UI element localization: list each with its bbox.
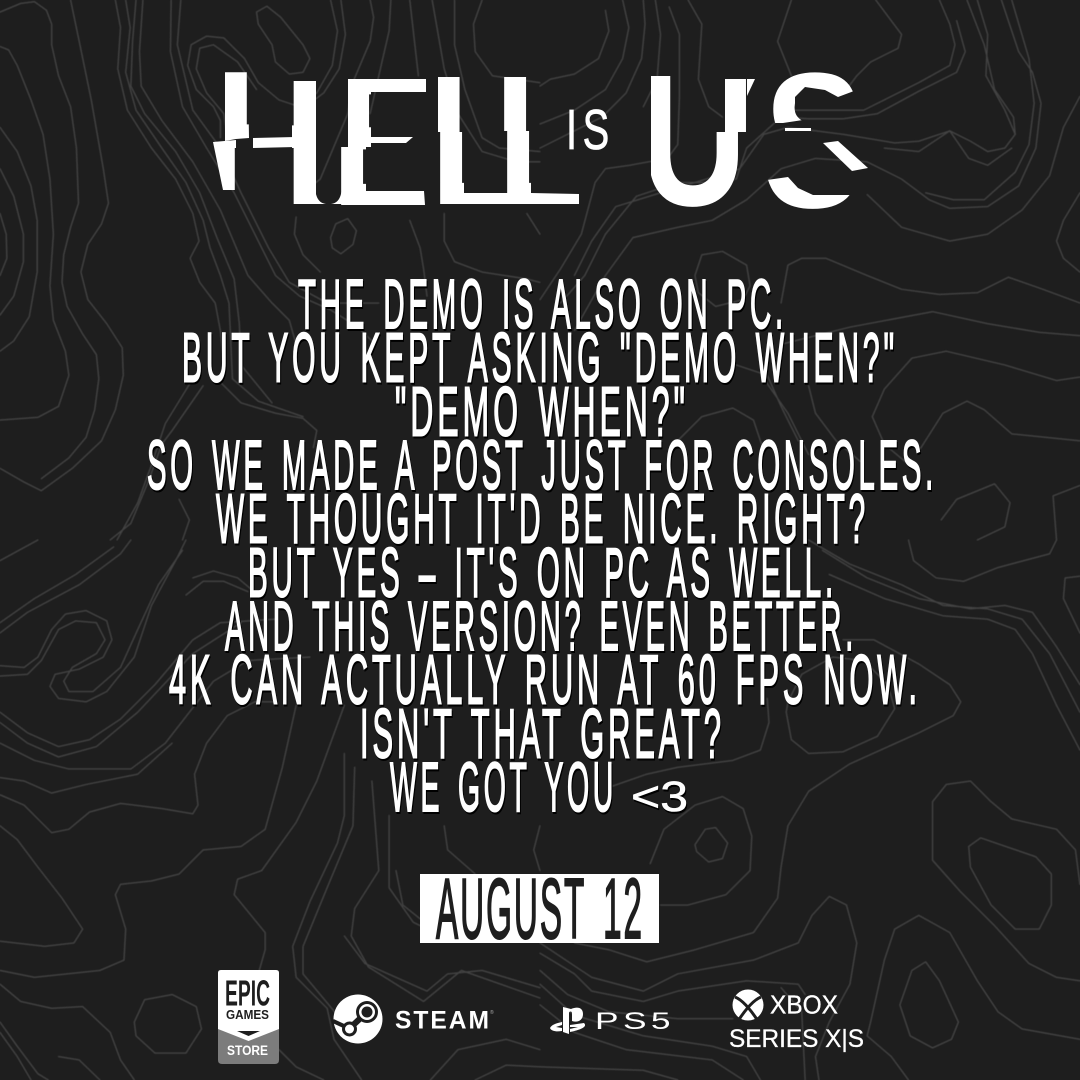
title logo: HELL IS US: S (764, 34, 865, 246)
title logo: HELL IS US: U (648, 34, 755, 246)
title logo: HELL IS US: H (214, 31, 327, 244)
title logo: HELL IS US (213, 72, 868, 209)
title logo: HELL IS US: L (497, 33, 590, 245)
icon: PS5: PS5 (595, 1008, 675, 1035)
icon: PS5 (550, 1007, 675, 1035)
icon: Steam: STEAM (395, 1006, 491, 1034)
icon: Steam: ® (490, 1009, 494, 1016)
title logo: HELL IS US: IS (566, 98, 615, 162)
icon: Epic Games Store: EPIC (225, 972, 270, 1014)
title logo: HELL IS US: S (762, 36, 863, 248)
title logo: HELL IS US: H (218, 31, 331, 244)
icon: Xbox Series X|S (729, 990, 864, 1053)
title logo: HELL IS US: E (337, 33, 438, 245)
icon: Xbox Series X|S: XBOX (770, 992, 838, 1020)
icon: Epic Games Store (218, 970, 279, 1064)
date badge: August 12 (420, 862, 659, 957)
title logo: HELL IS US: S (774, 41, 875, 253)
main message text: WE GOT YOU (390, 748, 617, 826)
icon: Steam (333, 994, 494, 1044)
text: AUGUST 12 (436, 862, 644, 957)
icon: Epic Games Store: STORE (227, 1043, 268, 1058)
main message text: "DEMO WHEN?" (395, 372, 689, 450)
title logo: HELL IS US: L (428, 33, 520, 245)
title logo: HELL IS US: L (494, 33, 587, 245)
title logo: HELL IS US: L (430, 33, 523, 245)
title logo: HELL IS US: U (640, 34, 747, 246)
title logo: HELL IS US: H (202, 31, 315, 244)
main message text (147, 265, 937, 826)
title logo: HELL IS US: E (331, 34, 432, 246)
icon: Epic Games Store: GAMES (226, 1007, 269, 1022)
main message text: <3 (631, 773, 688, 821)
title logo: HELL IS US: H (214, 30, 327, 243)
icon: Xbox Series X|S: SERIES X|S (729, 1025, 864, 1053)
